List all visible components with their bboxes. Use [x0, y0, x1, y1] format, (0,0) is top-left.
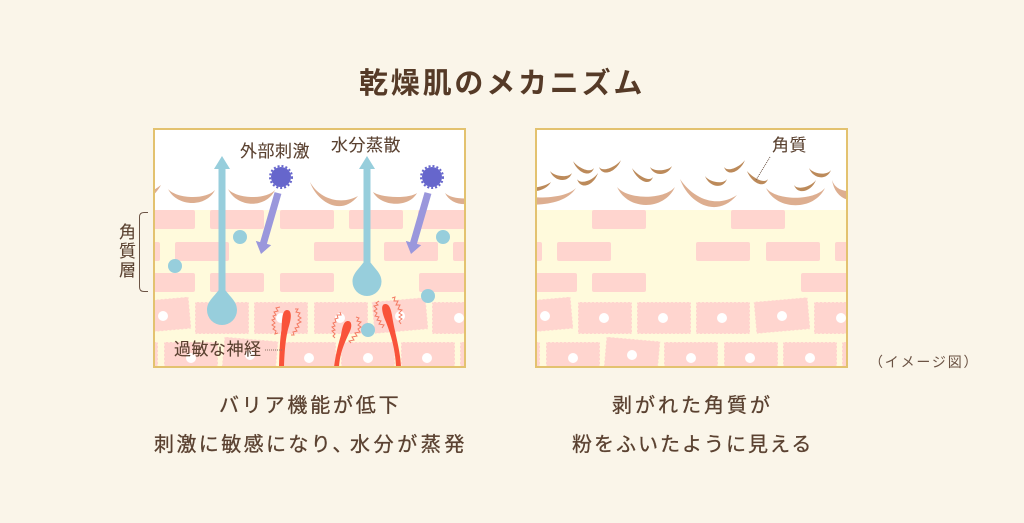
lower skin cells — [155, 297, 464, 366]
label: horny layer — [119, 223, 136, 280]
panel: flaking skin — [535, 128, 848, 368]
label: horny layer: 角 — [119, 223, 136, 242]
bracket: horny layer — [140, 212, 148, 292]
caption right: 粉をふいたように見える — [572, 433, 813, 456]
title: 乾燥肌のメカニズム — [359, 66, 645, 100]
flake leader line — [756, 157, 770, 180]
horny layer bricks — [150, 210, 473, 292]
nerve leader line — [265, 349, 282, 351]
small peeling flakes — [525, 160, 831, 191]
cell nuclei — [158, 311, 464, 363]
caption left: バリア機能が低下 — [219, 394, 401, 417]
water particles — [168, 230, 450, 337]
irritant arrow left — [256, 192, 281, 254]
label: water evaporation: 水分蒸散 — [331, 136, 401, 155]
irritant particle right — [421, 166, 443, 188]
lower skin cells — [537, 297, 846, 366]
panel border right — [536, 129, 847, 367]
irritant particle left — [270, 166, 292, 188]
caption left: 水分が蒸発 — [350, 433, 468, 456]
panel border left — [154, 129, 465, 367]
label: external stimulus: 外部刺激 — [240, 142, 310, 161]
label: sensitive nerve: 過敏な神経 — [174, 340, 262, 359]
caption left — [154, 394, 468, 456]
label: horny layer: 層 — [119, 261, 136, 280]
caption right — [572, 394, 813, 456]
flakes — [155, 182, 464, 206]
moisture arrow and drop left — [207, 156, 237, 325]
moisture arrow and drop right — [352, 156, 382, 296]
label: horny substance: 角質 — [772, 136, 807, 155]
sensitive nerves — [279, 304, 401, 367]
label: horny layer: 質 — [119, 242, 136, 261]
note: image diagram: （イメージ図） — [869, 354, 979, 370]
cell nuclei — [540, 311, 846, 363]
horny layer bricks — [532, 210, 855, 292]
nerve irritation squiggles — [272, 297, 402, 343]
large flakes — [520, 179, 852, 207]
caption left: 刺激に敏感になり、 — [154, 433, 355, 456]
caption right: 剥がれた角質が — [612, 394, 773, 417]
irritant arrow right — [406, 192, 431, 254]
panel: barrier function decline — [153, 128, 466, 368]
